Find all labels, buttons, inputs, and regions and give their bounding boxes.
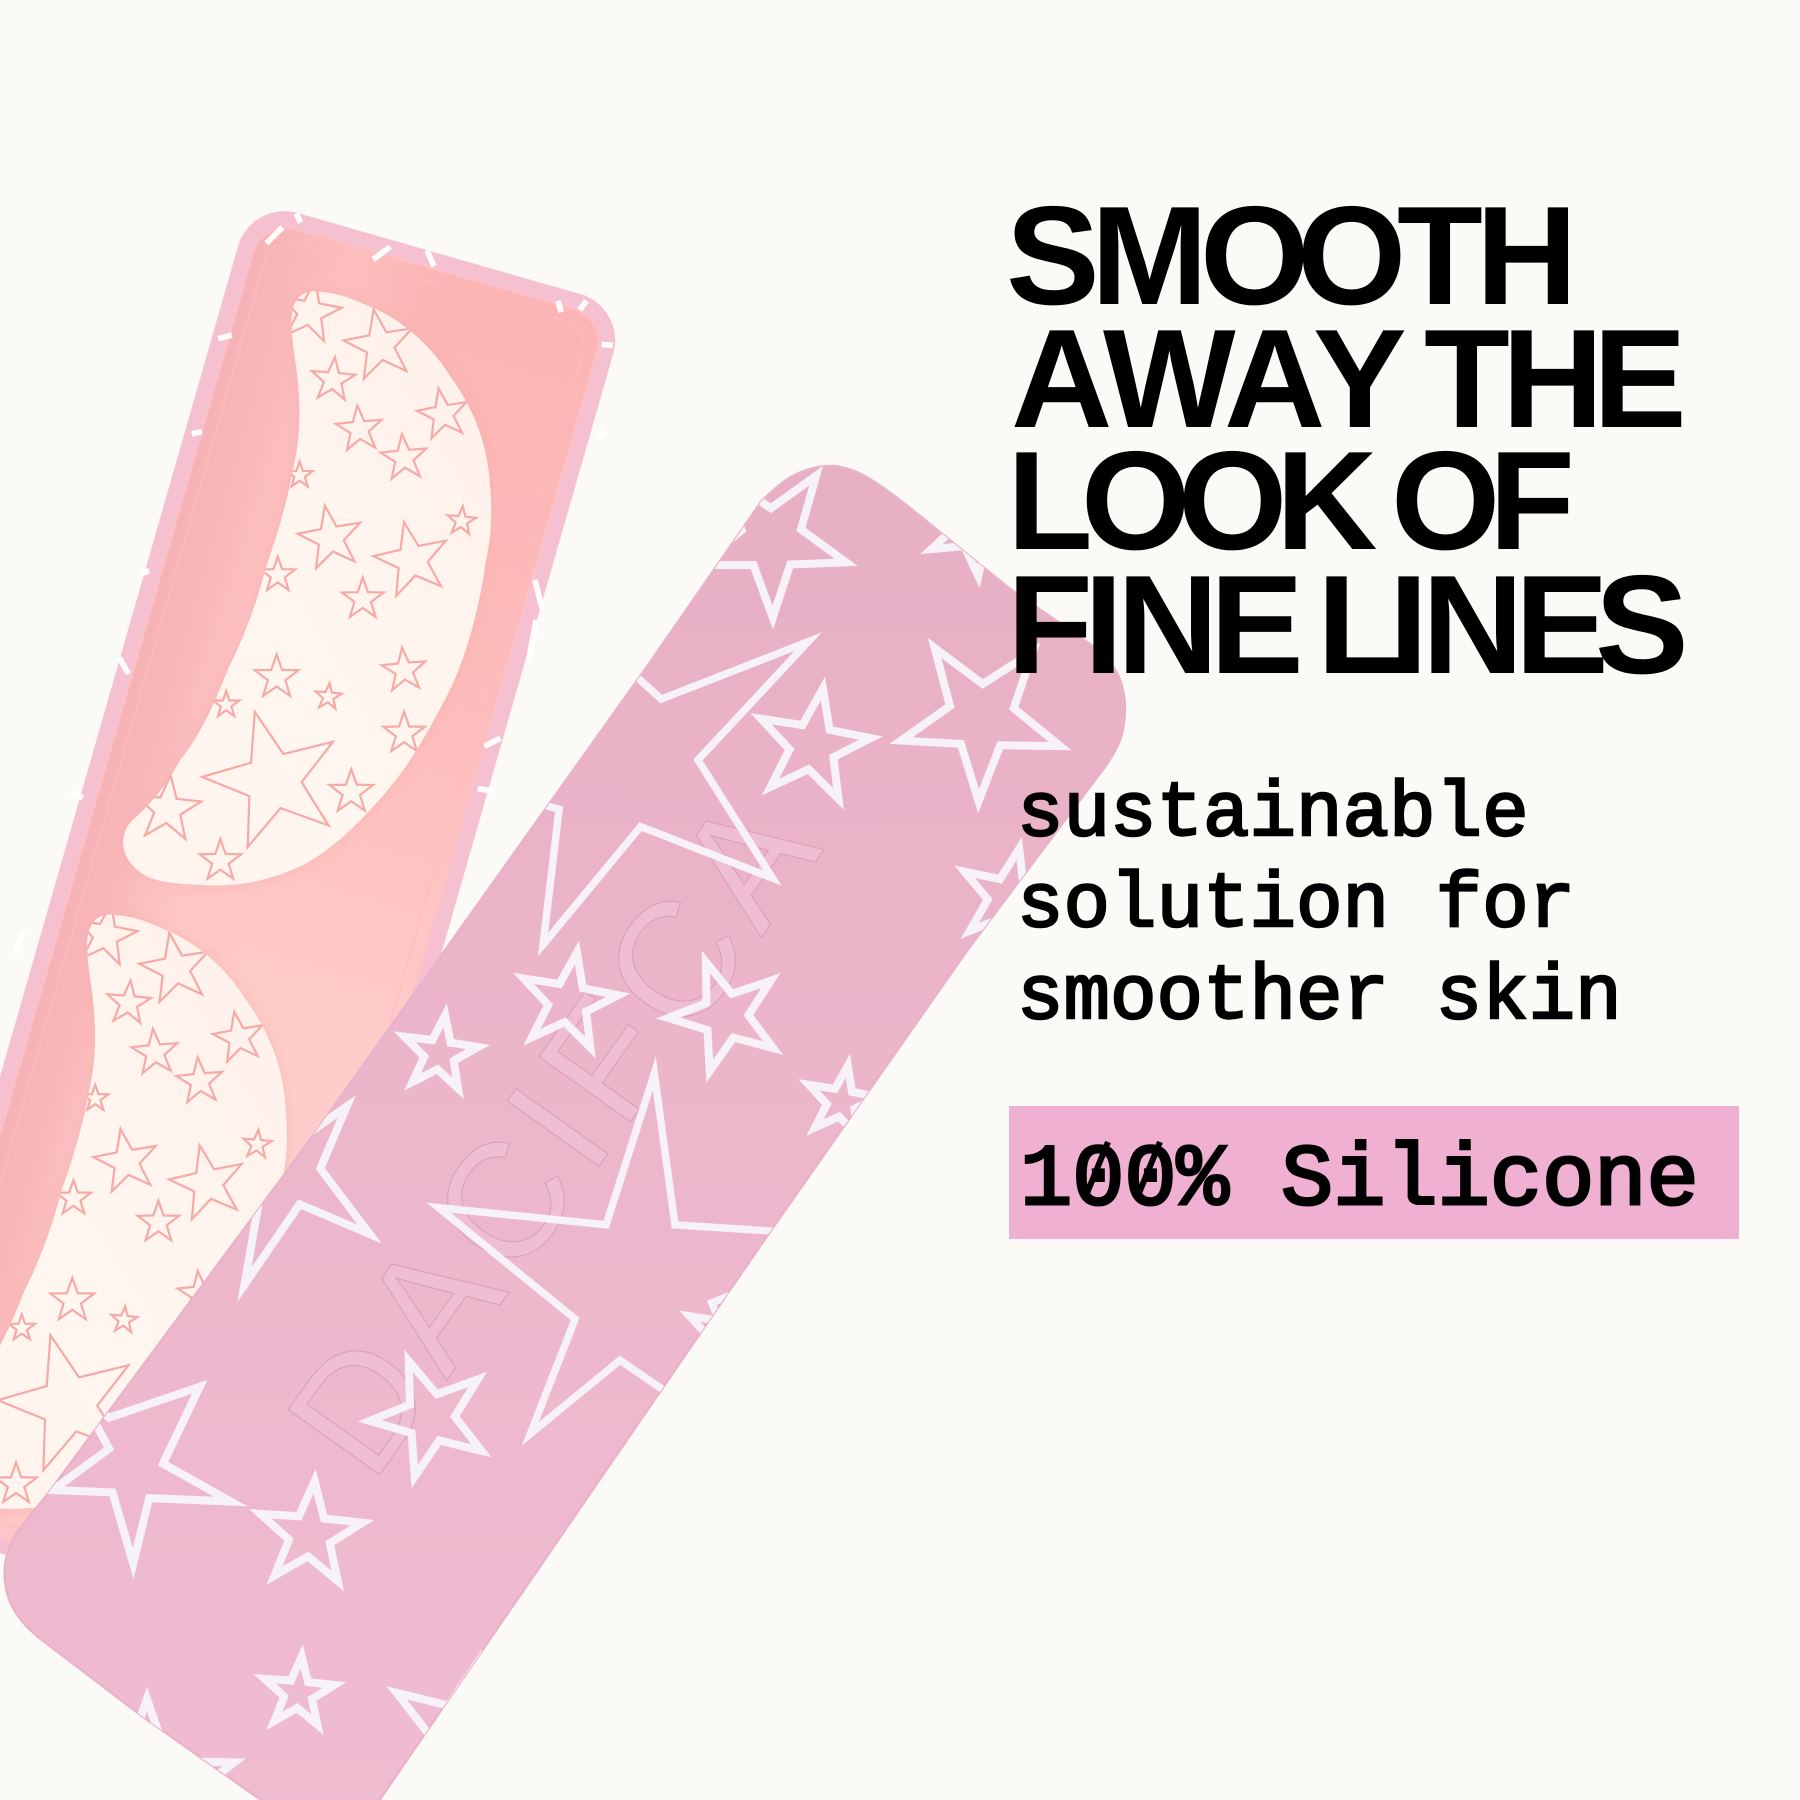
title: headline: LOOK OF [1007, 422, 1575, 579]
text block: subheading: solution for [1017, 862, 1575, 950]
callout: 100% Silicone badge [1009, 1106, 1739, 1239]
lid body [5, 466, 1125, 1800]
eye patch: upper [123, 275, 491, 886]
tray interior [0, 220, 607, 1605]
text block: subheading [1017, 771, 1622, 1042]
tray rim print marks [16, 214, 613, 953]
embossed logo on lid: DACIFCA [251, 763, 853, 1506]
callout: 100% Silicone badge: 100% Silicone [1020, 1133, 1699, 1231]
title: headline: FINE LINES [1007, 546, 1689, 703]
tray: open silicone tin base [0, 200, 627, 1625]
title: headline [1006, 177, 1689, 703]
eye patch: lower [0, 899, 287, 1509]
title: headline: SMOOTH [1006, 177, 1577, 334]
white star pattern on lid [53, 433, 1096, 1800]
title: headline: AWAY THE [1011, 300, 1687, 457]
text block: subheading: sustainable [1017, 771, 1529, 859]
lid: pink star-printed tin lid [5, 433, 1125, 1800]
text block: subheading: smoother skin [1017, 954, 1622, 1042]
tray outer rim [0, 200, 627, 1625]
